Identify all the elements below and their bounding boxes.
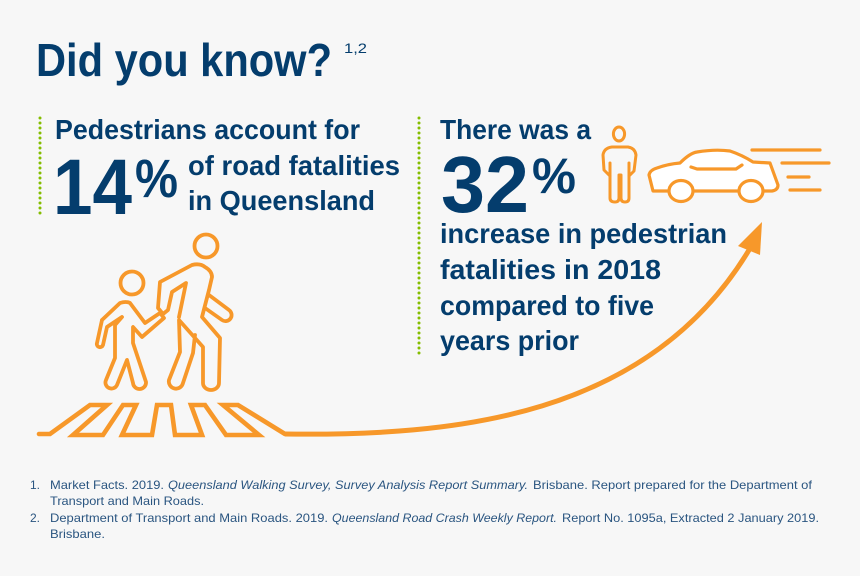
text block: 32 percent statistic: compared to five bbox=[440, 290, 654, 321]
text block: 14 percent statistic: of road fatalities bbox=[188, 150, 400, 181]
footnotes: Transport and Main Roads. bbox=[50, 494, 204, 508]
arrow: rising trend bbox=[285, 222, 762, 434]
text block: 14 percent statistic: % bbox=[135, 149, 178, 209]
footnotes: Report No. 1095a, Extracted 2 January 2019. bbox=[562, 511, 819, 525]
text block: 32 percent statistic: % bbox=[532, 148, 576, 204]
text block: 32 percent statistic: There was a bbox=[440, 114, 591, 145]
text block: 14 percent statistic: in Queensland bbox=[188, 185, 375, 216]
title: 1,2 bbox=[344, 40, 367, 56]
text block: 32 percent statistic: fatalities in 2018 bbox=[440, 254, 661, 285]
footnotes: Brisbane. Report prepared for the Department of bbox=[533, 478, 813, 492]
text block: 32 percent statistic: 32 bbox=[441, 140, 529, 229]
text block: 32 percent statistic: increase in pedestrian bbox=[440, 218, 727, 249]
footnotes: Department of Transport and Main Roads. 2019. bbox=[50, 511, 328, 525]
speed lines bbox=[752, 150, 829, 190]
footnotes: 1. bbox=[30, 478, 40, 492]
dotted divider left bbox=[38, 118, 42, 218]
text block: 14 percent statistic: 14 bbox=[53, 142, 132, 231]
icon: speeding car bbox=[649, 150, 829, 202]
footnotes: 2. bbox=[30, 511, 40, 525]
text block: 32 percent statistic bbox=[440, 114, 727, 356]
icon: adult and child walking bbox=[97, 234, 232, 390]
text block: 14 percent statistic: Pedestrians account for bbox=[55, 114, 360, 145]
text block: 32 percent statistic: years prior bbox=[440, 325, 579, 356]
footnotes bbox=[30, 478, 819, 541]
icon: pedestrian bbox=[603, 127, 636, 202]
footnotes: Brisbane. bbox=[50, 527, 105, 541]
text block: 14 percent statistic bbox=[53, 114, 400, 231]
dotted divider right bbox=[418, 118, 420, 356]
icon: zebra crossing bbox=[39, 405, 285, 435]
title: Did you know? bbox=[36, 34, 332, 86]
footnotes: Queensland Walking Survey, Survey Analysis Report Summary. bbox=[168, 478, 528, 492]
footnotes: Queensland Road Crash Weekly Report. bbox=[332, 511, 557, 525]
footnotes: Market Facts. 2019. bbox=[50, 478, 164, 492]
